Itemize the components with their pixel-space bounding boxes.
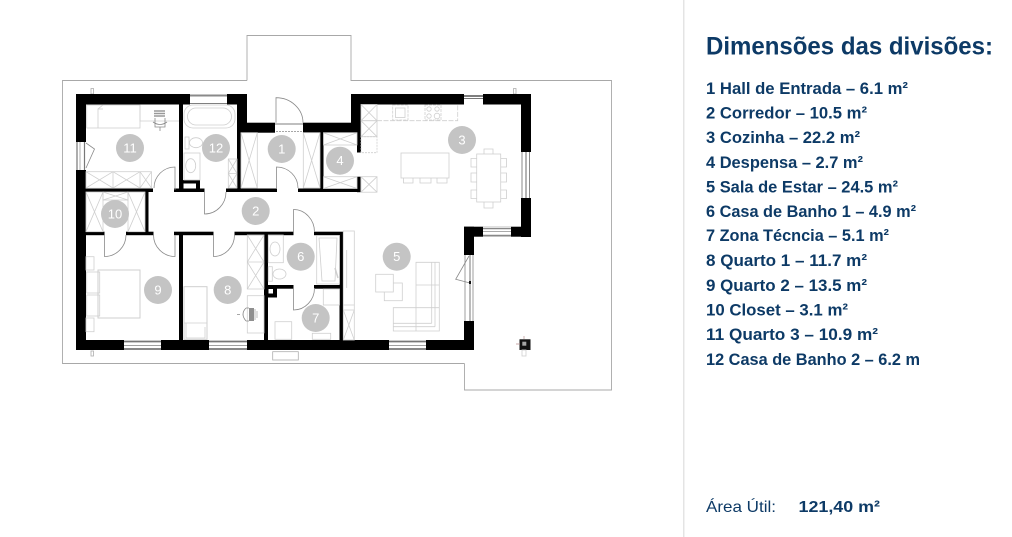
room dimensions list: 5 Sala de Estar – 24.5 m² <box>706 178 898 196</box>
room dimensions list: 6 Casa de Banho 1 – 4.9 m² <box>706 203 916 221</box>
furniture: technical zone <box>275 231 354 340</box>
site outline <box>62 36 612 390</box>
furniture: bedroom 3 <box>86 105 179 188</box>
marker 1 <box>268 135 296 163</box>
walls <box>76 94 531 350</box>
room dimensions list: 1 Hall de Entrada – 6.1 m² <box>706 80 908 98</box>
marker 10 <box>101 200 129 228</box>
icon: desk chair bedroom 1 <box>237 308 257 321</box>
marker 11 <box>116 134 144 162</box>
room dimensions list: 4 Despensa – 2.7 m² <box>706 154 864 172</box>
furniture: hall wardrobes <box>241 133 320 188</box>
furniture: kitchen <box>361 104 458 192</box>
marker 11: 11 <box>123 140 137 156</box>
room dimensions list: 12 Casa de Banho 2 – 6.2 m <box>706 351 920 369</box>
room dimensions list: 8 Quarto 1 – 11.7 m² <box>706 252 868 270</box>
icon: desk chair bedroom 3 <box>153 111 167 131</box>
room dimensions list: 2 Corredor – 10.5 m² <box>706 104 868 122</box>
room number markers <box>101 126 476 332</box>
furniture: sofa and tables <box>376 262 439 331</box>
marker 4 <box>326 147 354 175</box>
marker 5 <box>383 243 411 271</box>
furniture: bathroom 1 <box>268 235 340 284</box>
marker 2: 2 <box>252 204 259 218</box>
marker 12 <box>202 134 230 162</box>
panel divider <box>683 0 684 537</box>
furniture: bathroom 2 <box>184 105 237 188</box>
room dimensions list: 3 Cozinha – 22.2 m² <box>706 129 861 147</box>
marker 4: 4 <box>336 153 344 168</box>
pillar <box>516 336 530 356</box>
marker 7 <box>302 304 330 332</box>
marker 9 <box>144 276 172 304</box>
panel: floor plan <box>62 36 612 390</box>
exterior marks <box>91 88 516 360</box>
room dimensions list <box>706 80 920 369</box>
marker 3 <box>448 126 476 154</box>
marker 3: 3 <box>458 132 466 148</box>
marker 6 <box>287 243 315 271</box>
room dimensions list: 10 Closet – 3.1 m² <box>706 302 849 320</box>
furniture: bedroom 1 <box>184 235 264 339</box>
heading: Dimensões das divisões: <box>706 32 993 60</box>
furniture: closet <box>86 192 145 232</box>
marker 2 <box>242 197 270 225</box>
usable area <box>706 497 880 516</box>
marker 9: 9 <box>154 282 162 298</box>
usable area: Área Útil: <box>706 497 776 516</box>
marker 7: 7 <box>312 310 319 326</box>
room dimensions list: 11 Quarto 3 – 10.9 m² <box>706 326 879 344</box>
usable area: 121,40 m² <box>798 499 880 516</box>
marker 8 <box>214 276 242 304</box>
doors <box>104 98 314 310</box>
shaft openings <box>184 184 273 294</box>
marker 10: 10 <box>108 206 122 222</box>
furniture: bedroom 2 <box>86 257 140 332</box>
windows <box>76 94 531 350</box>
marker 1: 1 <box>278 142 285 156</box>
marker 6: 6 <box>297 249 304 264</box>
marker 5: 5 <box>393 249 400 264</box>
marker 8: 8 <box>224 282 231 298</box>
room dimensions list: 7 Zona Técncia – 5.1 m² <box>706 227 889 245</box>
furniture: pantry shelves <box>324 133 357 188</box>
marker 12: 12 <box>209 140 223 156</box>
furniture: dining table <box>471 149 506 208</box>
room dimensions list: 9 Quarto 2 – 13.5 m² <box>706 277 868 295</box>
